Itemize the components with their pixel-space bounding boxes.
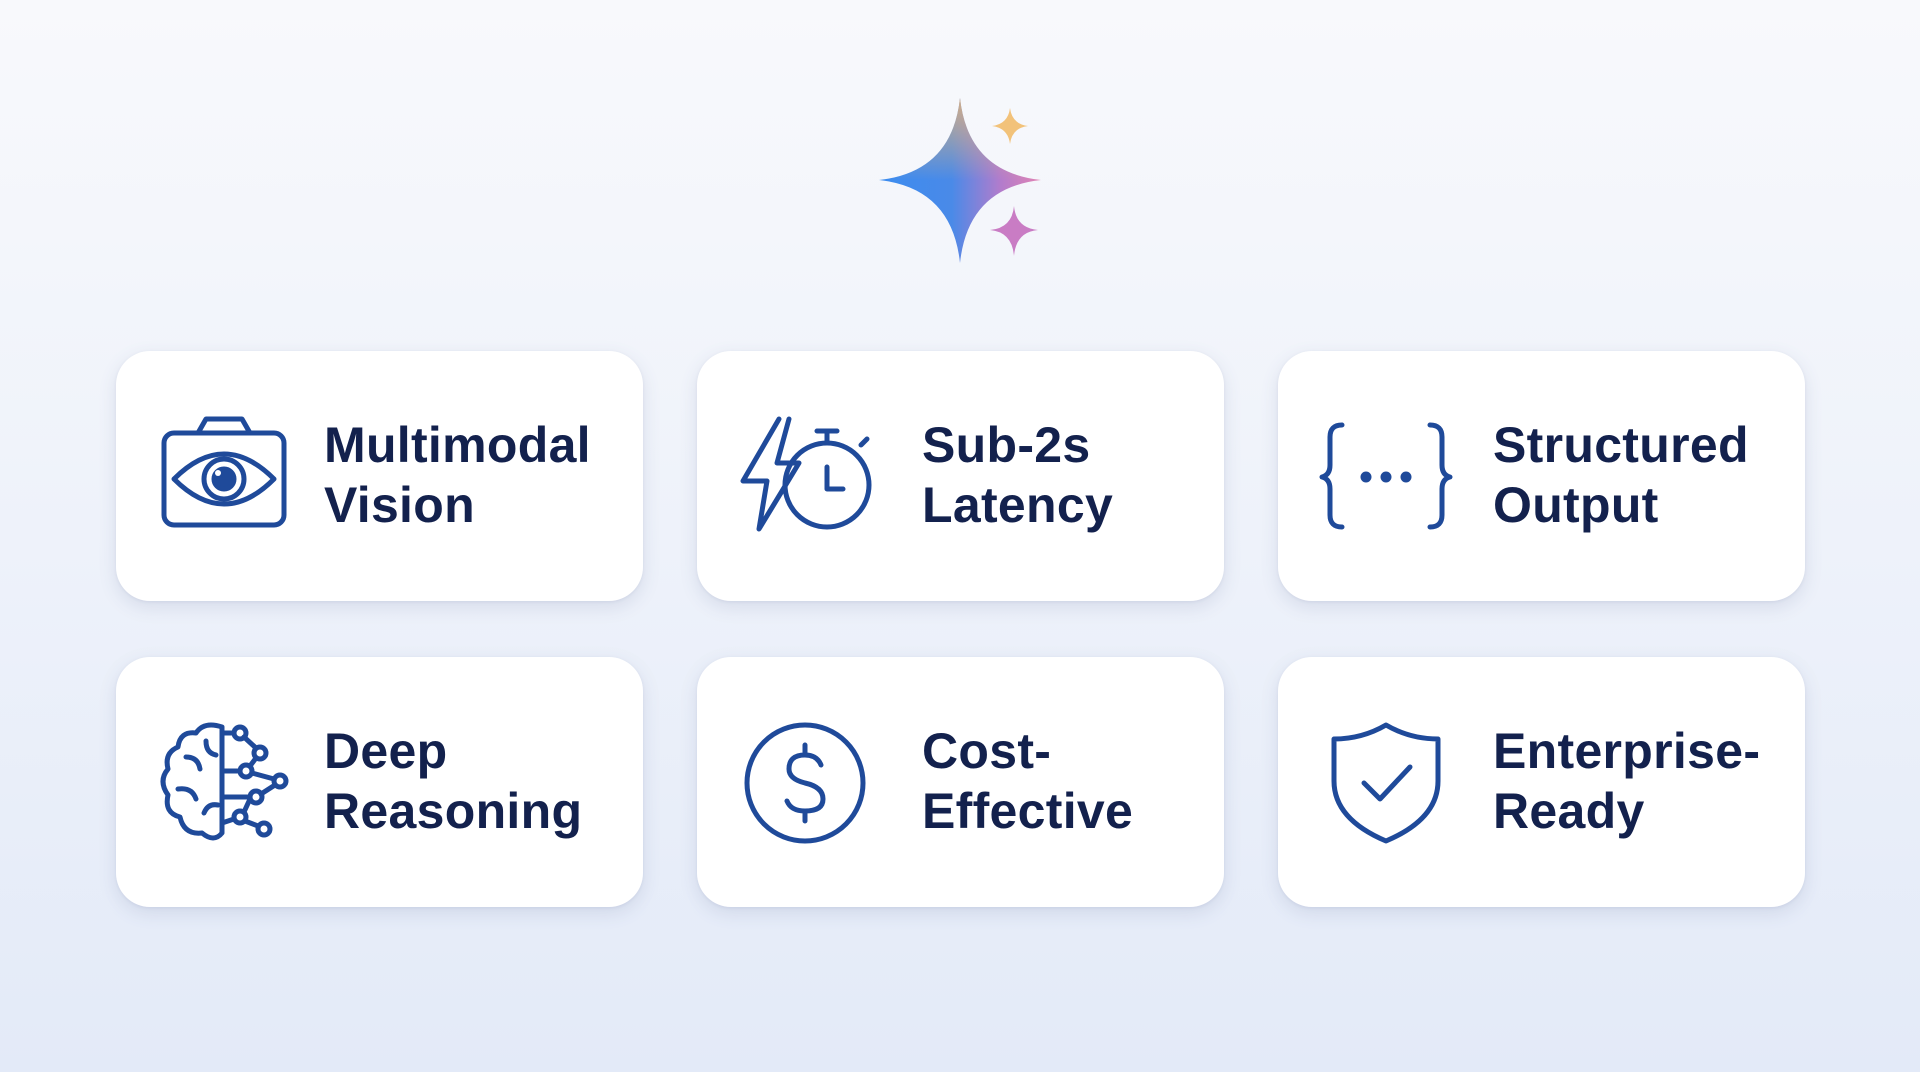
text: Sub-2s: [922, 417, 1090, 473]
text: Vision: [324, 477, 475, 533]
icon: shield check: [1332, 722, 1440, 844]
text: Multimodal: [324, 417, 591, 473]
text: [324, 417, 591, 533]
text: [922, 723, 1133, 839]
card: Cost-Effective: [697, 657, 1224, 907]
text: Ready: [1493, 783, 1645, 839]
text: Cost-: [922, 723, 1051, 779]
icon: bolt stopwatch: [740, 416, 872, 532]
text: [1493, 417, 1749, 533]
text: Output: [1493, 477, 1659, 533]
text: Structured: [1493, 417, 1749, 473]
text: [324, 723, 582, 839]
text: Deep: [324, 723, 447, 779]
text: Latency: [922, 477, 1113, 533]
logo: sparkle: [879, 98, 1040, 263]
text: Effective: [922, 783, 1133, 839]
card: Sub-2s Latency: [697, 351, 1224, 601]
card: Enterprise-Ready: [1278, 657, 1805, 907]
card: Deep Reasoning: [116, 657, 643, 907]
text: [1493, 723, 1760, 839]
text: Enterprise-: [1493, 723, 1760, 779]
icon: brain network: [160, 722, 288, 840]
icon: camera eye: [162, 416, 286, 528]
text: [922, 417, 1113, 533]
card: Multimodal Vision: [116, 351, 643, 601]
text: Reasoning: [324, 783, 582, 839]
icon: braces: [1320, 422, 1452, 530]
icon: dollar coin: [744, 722, 866, 844]
card: Structured Output: [1278, 351, 1805, 601]
